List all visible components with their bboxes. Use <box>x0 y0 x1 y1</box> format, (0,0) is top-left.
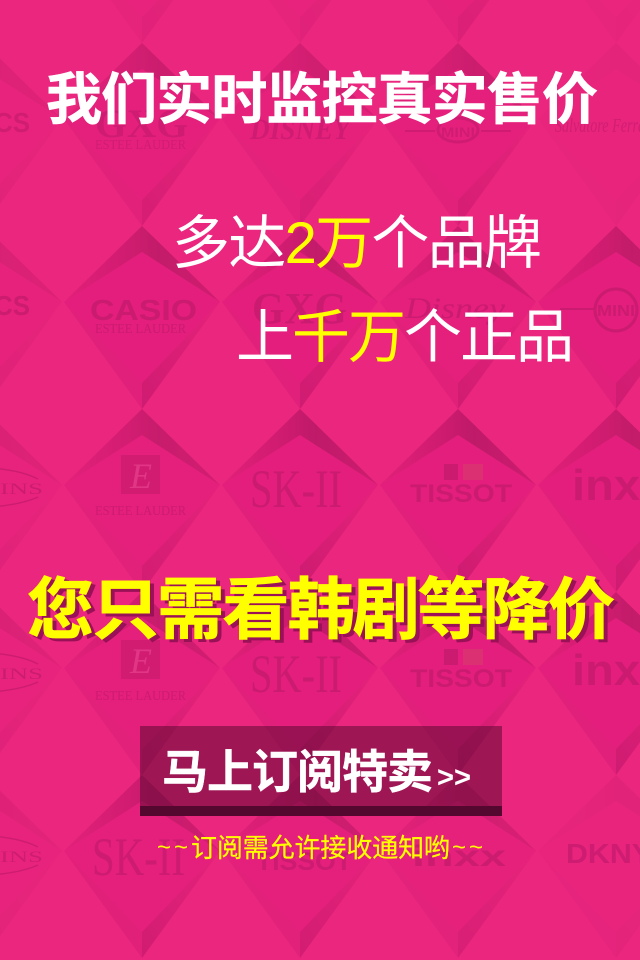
logo row 4 <box>0 640 640 704</box>
logo row 1: DISNEY <box>249 113 352 146</box>
footnote: ~ <box>174 834 188 861</box>
logo row 3: INS <box>0 481 43 498</box>
logo row 4: ESTEE LAUDER <box>95 689 187 704</box>
logo row 5: INS <box>0 849 43 866</box>
subscribe button: 马上订阅特卖 <box>162 746 433 798</box>
logo row 1 <box>0 101 640 153</box>
logo row 1: ESTEE LAUDER <box>95 138 187 153</box>
logo row 2: Disney <box>404 292 506 325</box>
logo row 4: INS <box>0 666 43 683</box>
headline: 您只需看韩剧等降价 <box>27 573 615 648</box>
logo row 1: GXG <box>95 101 188 146</box>
logo row 5 <box>0 827 640 887</box>
subscribe button: >> <box>437 761 471 794</box>
logo row 4: E <box>129 641 152 681</box>
logo row 3: TISSOT <box>410 480 512 508</box>
footnote: 订阅需允许接收通知哟 <box>191 833 450 863</box>
logo row 2: CASIO <box>90 295 197 327</box>
footnote: ~ <box>157 834 171 861</box>
logo row 2: MINI <box>597 303 635 320</box>
headline: 您只需看韩剧等降价 <box>31 576 619 651</box>
logo row 2: ESTEE LAUDER <box>95 322 187 337</box>
logo row 4: inx <box>572 646 640 695</box>
footnote: ~ <box>452 834 466 861</box>
logo row 4: TISSOT <box>410 665 512 693</box>
footnote: ~ <box>469 834 483 861</box>
logo row 5: SK-II <box>92 827 185 887</box>
logo row 2 <box>0 284 637 337</box>
logo row 4: SK-II <box>250 644 342 704</box>
logo row 3: SK-II <box>250 459 342 519</box>
logo row 3: inx <box>572 461 640 510</box>
logo row 5: inxx <box>412 840 506 873</box>
text line: brand count: 多达2万个品牌 <box>172 211 542 276</box>
logo row 5: TISSOT <box>256 848 352 876</box>
logo row 1: MINI <box>441 124 475 140</box>
title: 我们实时监控真实售价 <box>46 68 598 131</box>
logo row 3: ESTEE LAUDER <box>95 504 187 519</box>
logo row 3 <box>0 455 640 519</box>
text line: product count: 上千万个正品 <box>236 305 574 370</box>
logo row 3: E <box>129 456 152 496</box>
subscribe button <box>140 726 502 816</box>
logo row 2: GXG <box>252 284 347 333</box>
